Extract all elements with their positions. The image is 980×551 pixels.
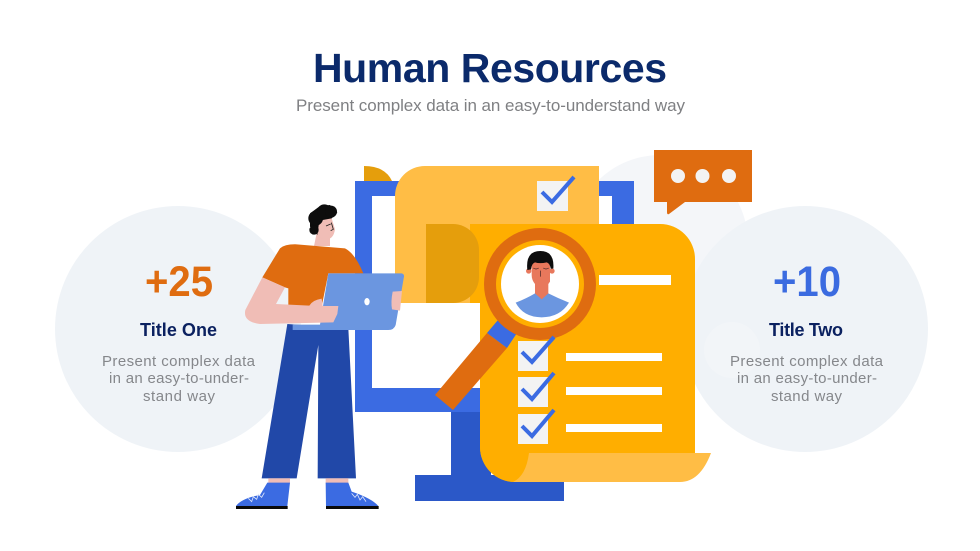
heading: title two: Title Two <box>769 320 843 340</box>
icon: main document <box>426 224 711 482</box>
icon: checkmark over magnifier <box>522 337 554 362</box>
illustration: person holding tablet <box>236 204 404 509</box>
description: title two: Present complex data <box>730 353 884 370</box>
shirt <box>262 244 363 307</box>
checklist row 3 <box>518 410 662 444</box>
title: Human Resources <box>313 45 667 91</box>
portrait <box>516 251 569 317</box>
panel: title one <box>55 206 301 452</box>
tablet <box>293 273 404 330</box>
decorative background blob <box>572 155 755 331</box>
subtitle: Present complex data in an easy-to-understand way <box>296 96 686 115</box>
icon: computer monitor <box>355 181 634 501</box>
description: title two <box>730 353 884 405</box>
description: title one: in an easy-to-under- <box>109 370 249 387</box>
checklist row 2 <box>518 373 662 407</box>
description: title two: stand way <box>771 388 842 405</box>
icon: chat bubble <box>654 150 752 214</box>
heading: title one: Title One <box>140 320 217 340</box>
description: title two: in an easy-to-under- <box>737 370 877 387</box>
arm and hands <box>245 277 402 324</box>
ankles and shoes <box>236 478 379 509</box>
icon: top checkbox <box>537 177 574 211</box>
stat: +10: +10 <box>773 258 841 306</box>
icon: back document <box>364 166 599 303</box>
stat: +25: +25 <box>145 258 213 306</box>
icon: magnifying glass with portrait <box>435 228 596 410</box>
checklist row 1 <box>518 341 662 371</box>
description: title one <box>102 353 256 405</box>
description: title one: Present complex data <box>102 353 256 370</box>
neck and head <box>308 204 337 246</box>
panel: title two <box>682 206 928 452</box>
trousers <box>262 324 356 478</box>
description: title one: stand way <box>143 388 216 405</box>
